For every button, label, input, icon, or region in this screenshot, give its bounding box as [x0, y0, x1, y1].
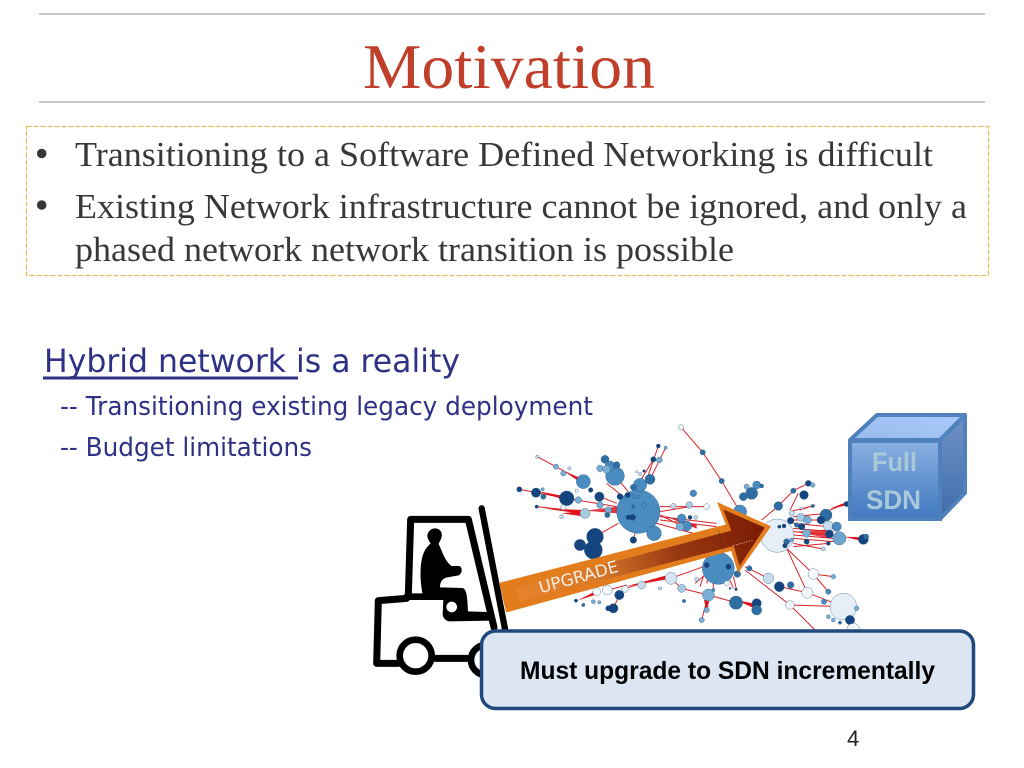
icon: forklift — [377, 508, 505, 675]
heading: hybrid network: Hybrid network is a reality — [44, 342, 460, 380]
icon: driver silhouette — [421, 528, 491, 621]
icon: full SDN cube: Full — [872, 447, 917, 477]
arrow: upgrade — [500, 503, 770, 612]
panel: key points: phased network network transition is possible — [75, 230, 734, 269]
icon: full SDN cube: SDN — [866, 485, 921, 515]
callout: incremental upgrade — [482, 631, 974, 708]
nodes — [517, 425, 869, 637]
text block: reasons: -- Transitioning existing legacy deployment — [60, 392, 593, 422]
text block: reasons: -- Budget limitations — [60, 433, 312, 463]
panel: key points: Existing Network infrastructure cannot be ignored, and only a — [75, 187, 967, 226]
icon: full SDN cube — [850, 415, 965, 519]
panel: key points: Transitioning to a Software Defined Networking is difficult — [75, 135, 933, 174]
page number: 4 — [847, 726, 859, 751]
text block: reasons — [60, 392, 593, 463]
panel: key points — [26, 126, 988, 276]
chart: network graph — [517, 425, 869, 637]
callout: incremental upgrade: Must upgrade to SDN incrementally — [520, 657, 935, 685]
red bundles — [536, 471, 863, 612]
arrow label: UPGRADE — [537, 557, 620, 597]
title: Motivation — [363, 31, 655, 102]
